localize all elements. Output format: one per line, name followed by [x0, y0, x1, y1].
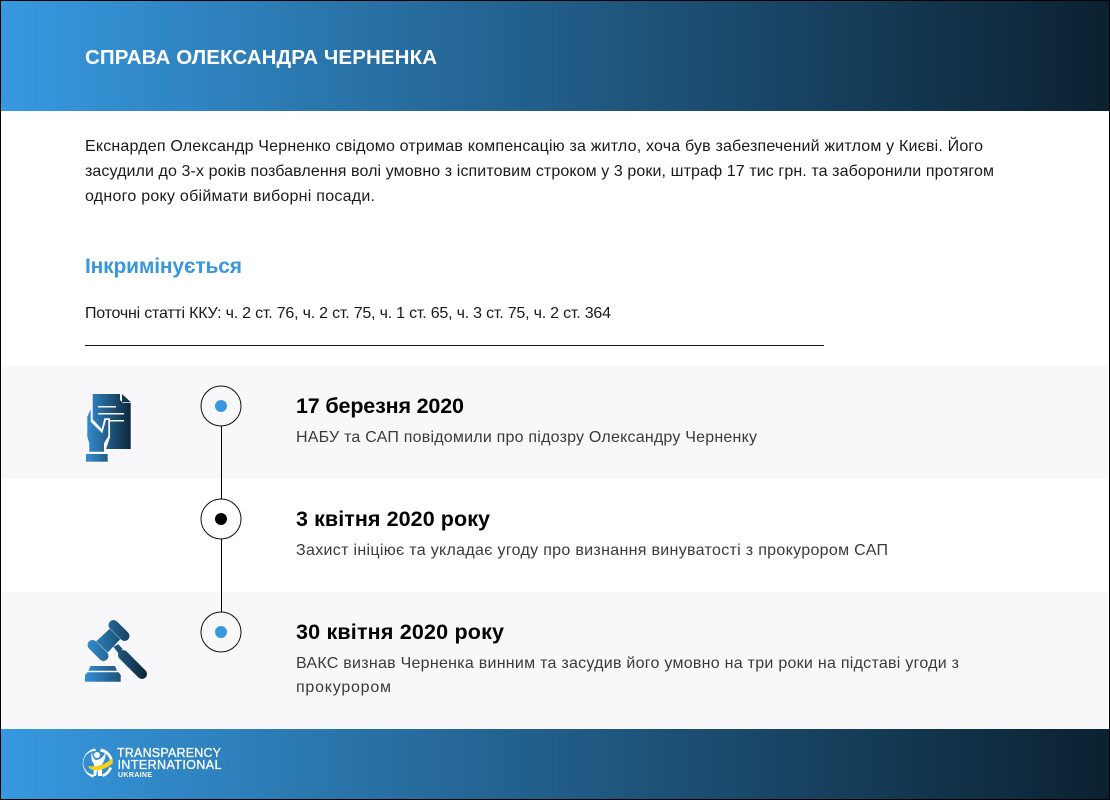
intro paragraph: Екснардеп Олександр Черненко свідомо отримав компенсацію за житло, хоча був забезпечений житлом у Києві. Його — [85, 136, 983, 155]
event: 17 березня 2020: 17 березня 2020 — [296, 394, 464, 418]
band: timeline row 3 — [0, 592, 1110, 729]
marker: 3 квітня — [201, 499, 241, 539]
event: 3 квітня 2020 року: Захист ініціює та укладає угоду про визнання винуватості з прокурором САП — [296, 542, 888, 559]
title: СПРАВА ОЛЕКСАНДРА ЧЕРНЕНКА — [85, 46, 437, 69]
intro paragraph — [85, 136, 994, 205]
event: 17 березня 2020: НАБУ та САП повідомили про підозру Олександру Черненку — [296, 429, 757, 446]
band: timeline row 1 — [0, 366, 1110, 479]
timeline connector — [221, 426, 222, 612]
event: 3 квітня 2020 року: 3 квітня 2020 року — [296, 507, 490, 531]
intro paragraph: одного року обіймати виборні посади. — [85, 188, 375, 205]
footer banner — [0, 729, 1110, 800]
icon: gavel — [85, 625, 142, 682]
header banner — [0, 0, 1110, 111]
marker: 30 квітня — [201, 612, 241, 652]
event: 30 квітня 2020 року: прокурором — [296, 679, 391, 696]
event: 17 березня 2020 — [296, 394, 757, 446]
logo: Transparency International Ukraine: INTERNATIONAL — [118, 758, 222, 772]
event: 3 квітня 2020 року — [296, 507, 888, 559]
icon: document in hand — [86, 394, 131, 462]
marker: 17 березня — [201, 386, 241, 426]
heading: incriminated: Інкримінується — [85, 255, 242, 278]
intro paragraph: засудили до 3-х років позбавлення волі умовно з іспитовим строком у 3 роки, штраф 17 тис грн. та заборонили протягом — [85, 163, 994, 180]
logo: Transparency International Ukraine: UKRAINE — [118, 772, 152, 779]
articles of the criminal code: Поточні статті ККУ: ч. 2 ст. 76, ч. 2 ст. 75, ч. 1 ст. 65, ч. 3 ст. 75, ч. 2 ст. 364 — [85, 305, 611, 322]
event: 30 квітня 2020 року — [296, 620, 959, 696]
event: 30 квітня 2020 року: 30 квітня 2020 року — [296, 620, 504, 644]
event: 30 квітня 2020 року: ВАКС визнав Черненка винним та засудив його умовно на три роки на підставі угоди з — [296, 655, 959, 672]
logo: Transparency International Ukraine — [83, 746, 222, 779]
logo: Transparency International Ukraine: TRANSPARENCY — [117, 746, 222, 760]
